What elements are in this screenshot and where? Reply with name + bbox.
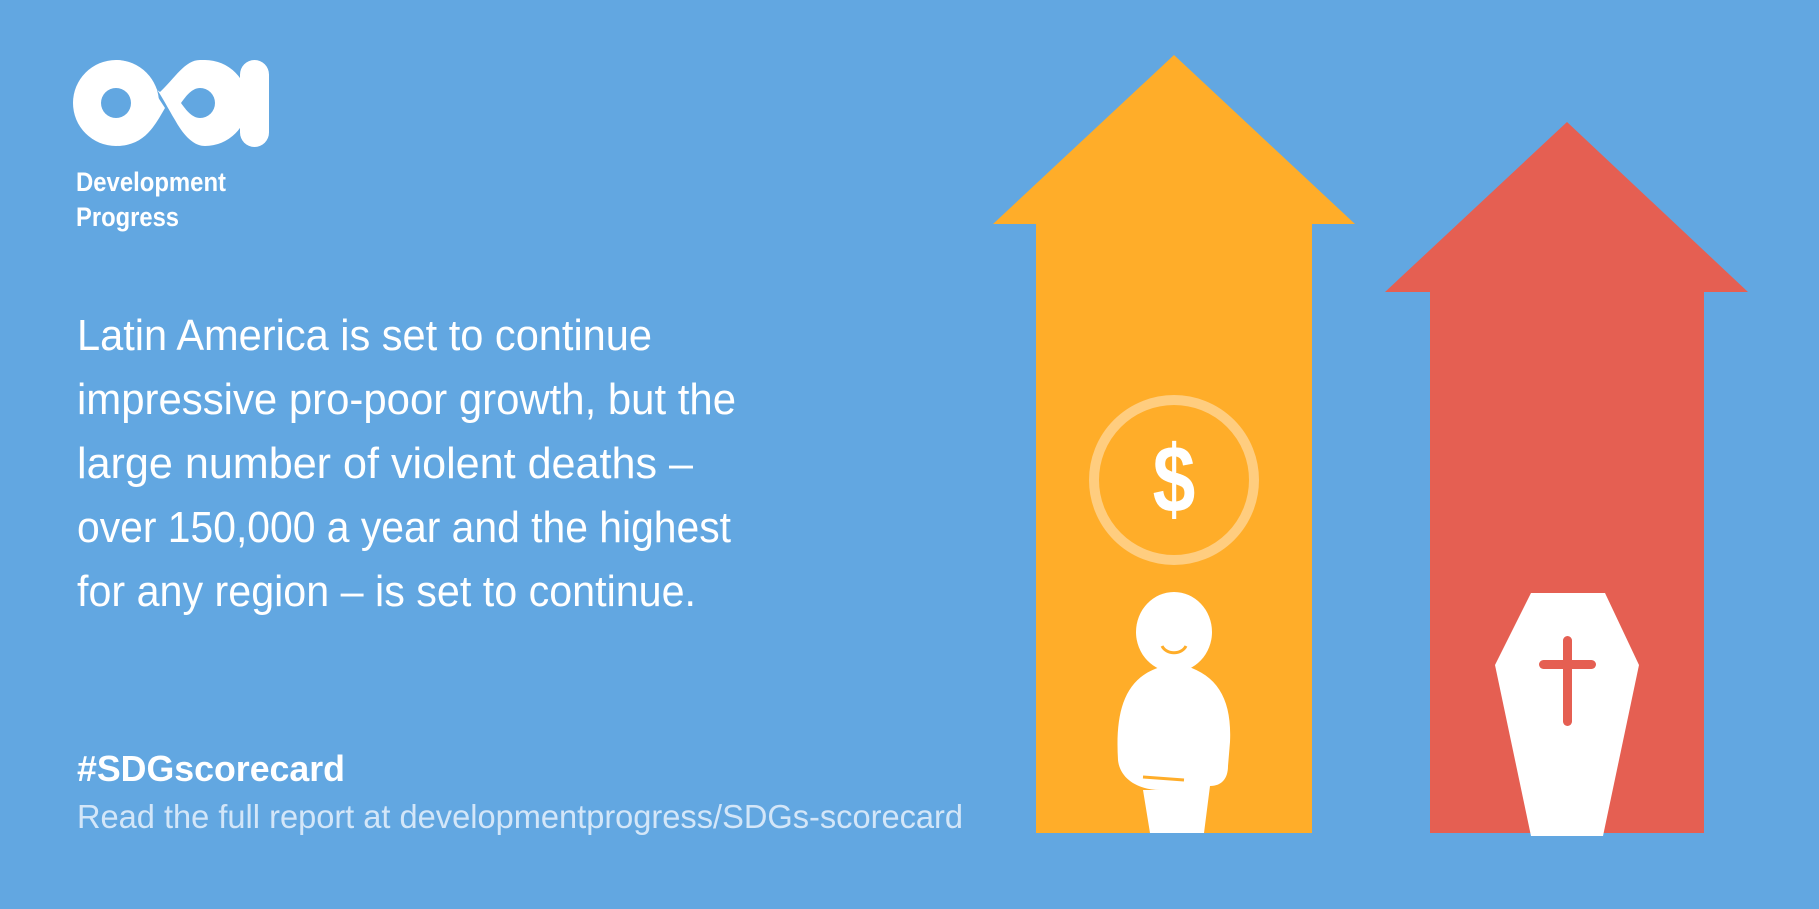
main text: over 150,000 a year and the highest <box>77 503 731 552</box>
icon: coin <box>1094 400 1254 560</box>
main text <box>77 311 736 616</box>
icon: coin: $ <box>1153 426 1195 533</box>
logo: ODI <box>73 60 269 147</box>
main text: large number of violent deaths – <box>77 439 694 488</box>
logo text: Development <box>76 167 226 197</box>
red arrow: violent deaths <box>1385 122 1748 836</box>
icon: person <box>1118 592 1230 833</box>
report link: Read the full report at developmentprogress/SDGs-scorecard <box>77 798 963 835</box>
logo text <box>76 167 226 232</box>
main text: Latin America is set to continue <box>77 311 652 360</box>
main text: for any region – is set to continue. <box>77 567 696 616</box>
logo text: Progress <box>76 202 179 232</box>
hashtag: #SDGscorecard <box>77 748 345 789</box>
icon: coffin <box>1495 593 1639 836</box>
main text: impressive pro-poor growth, but the <box>77 375 736 424</box>
orange arrow: growth <box>993 55 1355 833</box>
